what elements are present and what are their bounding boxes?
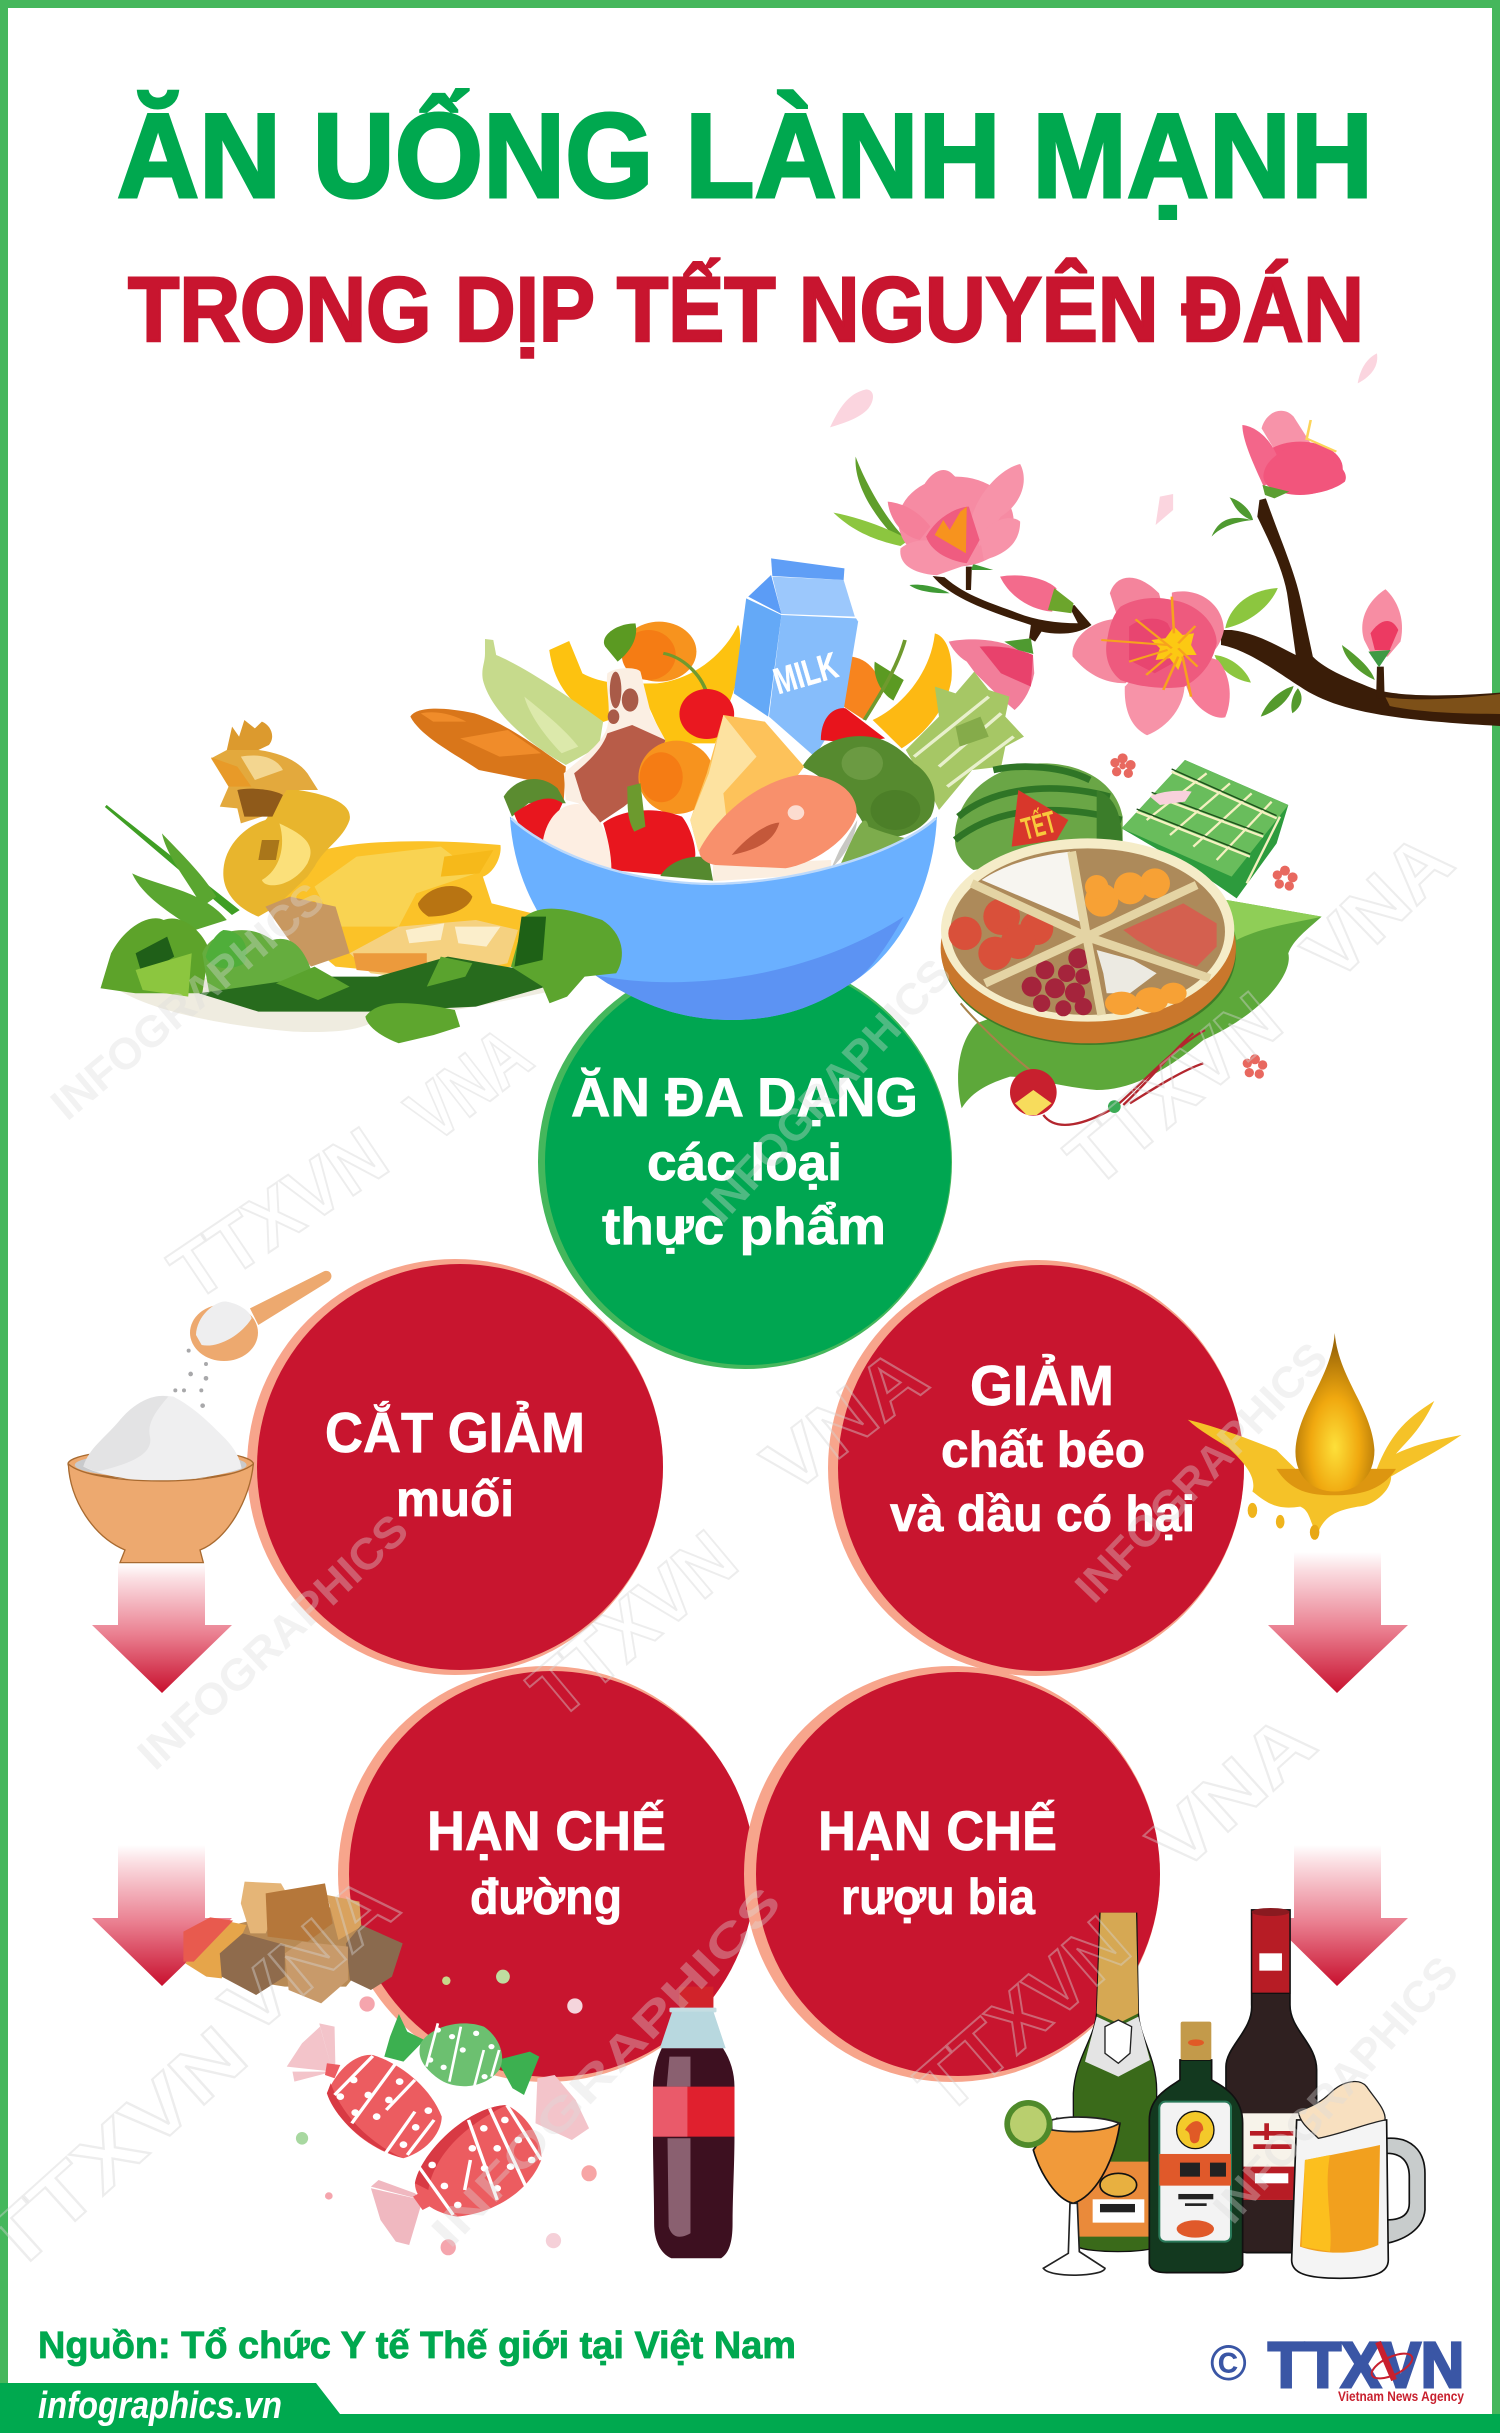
spoon [190,1271,331,1361]
chicken comb [227,720,272,750]
watermelon [955,763,1123,870]
red tag [1012,790,1068,847]
celery [906,672,1024,810]
arrow: sugar [92,1845,232,1986]
title line 1: ĂN UỐNG LÀNH MẠNH [117,89,1373,223]
circle: hạn chế đường [338,1666,755,2082]
arrow tint over cube [183,1917,233,1962]
watermarks: TTXVN [899,1899,1146,2130]
circle: giảm chất béo [828,1260,1244,1676]
circle: hạn chế rượu bia [744,1666,1160,2082]
broccoli [802,736,935,867]
circle: hạn chế rượu bia: HẠN CHẾ [818,1799,1057,1862]
watermarks [0,816,1469,2289]
tray dividers [972,852,1210,1015]
chicken neck [223,788,350,917]
tray side [942,862,1236,1045]
circle: ăn đa dạng: các loại [647,1134,842,1192]
white pork and tangerines bottom [1097,950,1157,993]
left front cube [220,1933,285,1995]
rice wedge [982,852,1080,922]
icon: Tet tray with watermelon and chung cake [941,753,1322,1125]
right leaf [874,662,904,701]
left flower [888,464,1024,575]
title line 2: TRONG DỊP TẾT NGUYÊN ĐÁN [128,257,1364,361]
back-left cube [185,1918,247,1978]
circle: giảm chất béo: GIẢM [970,1353,1114,1418]
sugar base shadow [212,1903,384,1987]
source note: Nguồn: Tổ chức Y tế Thế giới tại Việt Nam [38,2325,796,2367]
bud calyx [1048,588,1074,613]
shredded meat [1123,903,1217,967]
icon: food bowl [410,558,1024,1020]
icon: sugar cubes [183,1882,403,2003]
arrow: salt [92,1563,232,1693]
tangerines top [1085,868,1170,917]
watermarks: INFOGRAPHICS [693,950,961,1232]
margarita glass [1004,2100,1120,2275]
right cherry [821,708,885,743]
cherry [663,653,707,693]
small red pepper [504,779,566,817]
arrow: alcohol [1268,1845,1408,1986]
salt bowl rim [68,1449,253,1479]
watermarks: VNA [1286,816,1469,997]
big center flower [1072,578,1230,735]
decorative red flowers [1110,753,1298,1079]
plate [106,977,550,1032]
top flower [1242,411,1346,498]
red bell pepper [603,810,695,875]
chicken head [211,749,318,823]
watermarks: TTXVN [512,1513,753,1735]
splash [1188,1401,1462,1540]
bananas [549,625,740,743]
zucchini [482,639,603,765]
cheese [690,715,804,852]
watermarks: VNA [746,1330,942,1510]
bowl bottom leaf [660,857,713,881]
bread [410,709,566,800]
watermarks: INFOGRAPHICS [1066,1333,1337,1612]
watermarks: INFOGRAPHICS [422,1878,791,2257]
salmon [699,775,857,868]
circle: giảm chất béo: và dầu có hại [890,1486,1195,1542]
champagne bottle [1073,1913,1157,2252]
salt mound [83,1396,242,1481]
circle: hạn chế đường: HẠN CHẾ [427,1799,666,1862]
TTXVN logo: Vietnam News Agency [1338,2388,1464,2404]
candy confetti dots [296,1970,597,2255]
title [117,89,1373,361]
icon: boiled chicken plate [101,720,622,1043]
cherries bottom [1022,948,1092,1016]
wine bottle [1226,1908,1317,2253]
center front cube [285,1942,348,2003]
milk carton: MILK [766,646,848,702]
watermarks: TTXVN [1049,975,1297,1203]
circle: giảm chất béo: chất béo [941,1422,1145,1478]
leaf [604,623,636,662]
leaves [833,457,1375,717]
long green stalks [106,806,237,913]
egg [543,804,611,870]
footer website: infographics.vn [38,2385,282,2427]
arrow: fat and oil [1268,1552,1408,1693]
icon: oil drop with splash [1188,1333,1462,1540]
watermarks: INFOGRAPHICS [1204,1947,1468,2233]
icon: salt bowl and spoon [68,1271,331,1563]
watermarks: INFOGRAPHICS [42,874,334,1130]
circle: hạn chế đường: đường [470,1869,622,1925]
bud left of branch [1000,575,1056,612]
red fruits left [948,898,1053,970]
watermarks: VNA [390,1009,547,1158]
TTXVN logo: TTXVN [1268,2329,1464,2401]
icon: blossom branch [830,353,1500,735]
red candy left [287,2023,442,2158]
bowl body [510,817,937,1020]
footer band [0,2383,1500,2433]
salt bowl front [68,1464,253,1563]
green candy [384,2014,539,2095]
tray top rim [941,838,1234,1022]
circle: ăn đa dạng: thực phẩm [602,1198,886,1256]
stuffing and shredded toppings [265,897,350,967]
icon: candies [287,1970,734,2258]
watermarks: VNA [204,1857,414,2053]
red tag: TẾT [1018,804,1060,847]
salad greens [101,909,622,1043]
front orange [638,741,715,814]
salt grains [173,1349,208,1408]
banana leaf [958,900,1322,1108]
meat [564,668,665,823]
top left cube [241,1882,285,1933]
right banana [873,633,952,748]
soda bottle [653,1987,734,2258]
watermarks: INFOGRAPHICS [128,1505,418,1779]
right back cube [327,1895,361,1940]
branch wood [1221,498,1500,726]
right bud [1362,589,1402,667]
ornament [961,1003,1205,1125]
icon: alcohol group [1004,1908,1425,2278]
beer mug [1292,2082,1425,2278]
circle: cắt giảm muối: muối [396,1471,514,1527]
right orange [844,657,881,720]
watermarks: VNA [1131,1696,1332,1889]
circle: ăn đa dạng: ĂN ĐA DẠNG [571,1066,918,1128]
chung cake [1122,760,1288,898]
TTXVN logo: © [1210,2335,1247,2391]
drooping flower [949,638,1034,710]
orange [622,622,696,682]
red candy right [371,2075,589,2245]
milk carton [734,558,858,757]
green bottle [1149,2022,1243,2273]
drop [1295,1333,1374,1492]
top main cube [266,1883,333,1942]
circle: cắt giảm muối [247,1259,663,1675]
watermarks: TTXVN [154,1110,402,1317]
circle: hạn chế rượu bia: rượu bia [841,1869,1036,1925]
circle: cắt giảm muối: CẮT GIẢM [325,1400,585,1465]
far right cube [346,1925,403,1990]
circle: ăn đa dạng [538,955,952,1369]
chicken body [272,841,532,973]
falling petals [830,353,1377,525]
